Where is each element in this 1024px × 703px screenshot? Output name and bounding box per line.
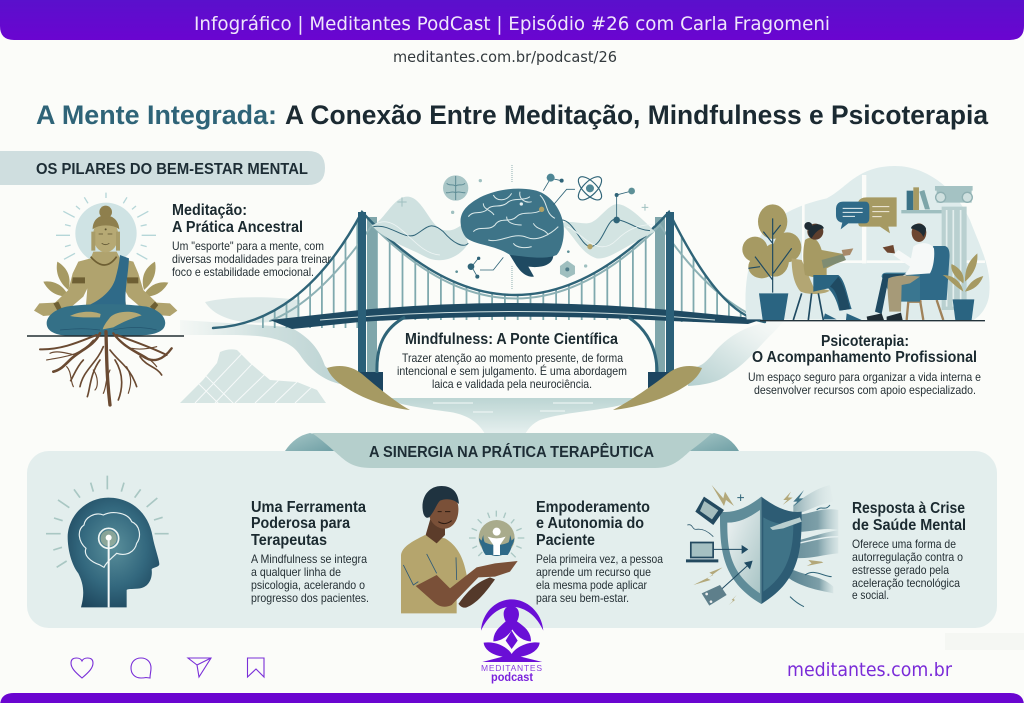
psicoterapia heading: O Acompanhamento Profissional (752, 349, 977, 366)
torso (401, 535, 467, 613)
leaves (43, 262, 168, 297)
brain body (461, 189, 564, 258)
psicoterapia text (748, 371, 981, 397)
crise text: Oferece uma forma de (852, 538, 956, 551)
brain outline (79, 513, 139, 567)
meditação heading (172, 202, 303, 236)
floor line (760, 319, 985, 323)
shield (720, 497, 761, 604)
card: empoderamento (401, 486, 663, 613)
empoderamento heading: Empoderamento (536, 499, 650, 516)
main title: A Conexão Entre Meditação, Mindfulness e Psicoterapia (285, 100, 989, 130)
logo podcast: podcast (491, 670, 533, 684)
far arm (458, 577, 495, 608)
head (68, 498, 159, 607)
halo and rays (56, 193, 156, 264)
legs (47, 304, 165, 336)
crise heading (852, 500, 966, 534)
meditação text (172, 240, 331, 279)
crise text: e social. (852, 589, 889, 602)
section banner: sinergia: A SINERGIA NA PRÁTICA TERAPÊUTICA (369, 443, 654, 461)
crise text (852, 538, 963, 602)
ferramenta heading: Terapeutas (251, 532, 327, 549)
empoderamento text: aprende um recurso que (536, 566, 651, 579)
cerebellum and stem (508, 251, 553, 277)
panel: mindfulness text: laica e validada pela neurociência. (432, 378, 592, 391)
small brain (443, 175, 468, 201)
body (34, 252, 177, 316)
panel: mindfulness text: intencional e sem julgamento. É uma abordagem (397, 365, 627, 378)
speech bubbles (836, 197, 897, 233)
crise heading: Resposta à Crise (852, 500, 965, 517)
empoderamento text: ela mesma pode aplicar (536, 579, 647, 592)
atom (553, 173, 605, 205)
empoderamento heading: e Autonomia do (536, 515, 644, 532)
dark towers (358, 212, 674, 373)
phone (695, 497, 724, 525)
crise heading: de Saúde Mental (852, 517, 966, 534)
waves right (770, 485, 838, 607)
icon: head with glowing brain (46, 476, 169, 607)
faint patch (945, 633, 1024, 650)
meditação text: foco e estabilidade emocional. (172, 266, 314, 279)
panel: sinergia background (27, 451, 997, 628)
psicoterapia text: Um espaço seguro para organizar a vida interna e (748, 371, 981, 384)
psicoterapia heading (752, 333, 977, 366)
icon: meditating figure with roots (34, 193, 177, 336)
therapist (792, 222, 862, 320)
arches (377, 317, 657, 373)
icon: bookmark (248, 658, 264, 677)
ferramenta text: a qualquer linha de (251, 566, 341, 579)
molecules and dots (397, 165, 648, 290)
icon: brain with waves (372, 165, 655, 290)
head (91, 206, 120, 252)
social icons (71, 658, 264, 678)
panel: mindfulness text (397, 331, 627, 391)
ferramenta heading: Poderosa para (251, 515, 350, 532)
psicoterapia text: desenvolver recursos com apoio especializado. (754, 384, 976, 397)
icon: suspension bridge (213, 212, 765, 410)
symbol (469, 511, 524, 557)
meditação heading: A Prática Ancestral (172, 219, 303, 236)
episode url: meditantes.com.br/podcast/26 (393, 48, 617, 66)
arm bands (53, 277, 158, 311)
card: resposta à crise (686, 485, 966, 607)
ferramenta text: A Mindfulness se integra (251, 553, 367, 566)
shelf and books (901, 210, 942, 213)
client (867, 223, 950, 320)
head (428, 496, 458, 529)
sand banks (327, 366, 410, 410)
plant left (742, 204, 801, 320)
header title: Infográfico | Meditantes PodCast | Episódio #26 com Carla Fragomeni (194, 13, 830, 35)
icon: therapy scene (742, 166, 990, 321)
cables (213, 212, 765, 328)
ferramenta heading (251, 499, 366, 549)
logo: meditantes podcast (481, 599, 543, 684)
ferramenta heading: Uma Ferramenta (251, 499, 366, 516)
meditação text: diversas modalidades para treinar (172, 253, 331, 266)
column (935, 186, 973, 310)
near arm (416, 561, 518, 607)
empoderamento heading (536, 499, 650, 549)
panel: mindfulness text: Mindfulness: A Ponte Científica (405, 331, 618, 348)
icon: comment (131, 658, 151, 678)
footer url: meditantes.com.br (787, 659, 952, 681)
light towers (367, 217, 665, 373)
neck (426, 517, 445, 543)
icon: send (188, 658, 211, 677)
empoderamento text: para seu bem-estar. (536, 592, 629, 605)
panel: psicoterapia (742, 166, 990, 397)
plant right (943, 253, 983, 320)
ferramenta text (251, 553, 369, 605)
panel: meditação (27, 193, 331, 405)
psicoterapia heading: Psicoterapia: (821, 333, 909, 350)
header bar (0, 0, 1024, 40)
robe (86, 255, 129, 307)
meditação text: Um "esporte" para a mente, com (172, 240, 324, 253)
bridge hangers (262, 265, 760, 270)
ground line (27, 335, 184, 337)
footer bar (0, 693, 1024, 703)
panel: mindfulness text: Trazer atenção ao momento presente, de forma (402, 352, 623, 365)
device (702, 585, 727, 606)
icon: person holding symbol (401, 486, 524, 613)
waves (372, 197, 655, 260)
hair (422, 486, 459, 518)
logo arc (481, 599, 543, 631)
icon: heart (71, 658, 93, 678)
crise text: estresse gerado pela (852, 564, 949, 577)
ferramenta text: psicologia, acelerando o (251, 579, 365, 592)
crise text: autorregulação contra o (852, 551, 963, 564)
arrows (707, 549, 750, 597)
roots (40, 332, 172, 405)
section banner: sinergia (285, 433, 739, 468)
rays (46, 476, 169, 567)
section pill: pilares: OS PILARES DO BEM-ESTAR MENTAL (36, 161, 308, 178)
card: ferramenta (46, 476, 369, 607)
ferramenta text: progresso dos pacientes. (251, 592, 369, 605)
river ribbons and hills (180, 297, 774, 403)
empoderamento heading: Paciente (536, 532, 595, 549)
lightning (693, 485, 823, 605)
empoderamento text: Pela primeira vez, a pessoa (536, 553, 663, 566)
deck (270, 303, 763, 329)
crise text: aceleração tecnológica (852, 577, 961, 590)
icon: shield with devices (686, 485, 838, 607)
room blob (745, 166, 990, 320)
logo wordmark: MEDITANTES (481, 663, 542, 673)
logo figure (493, 606, 531, 641)
main title: A Mente Integrada: (36, 100, 277, 130)
laptop (690, 542, 714, 558)
section pill: pilares (0, 151, 325, 185)
empoderamento text (536, 553, 663, 605)
meditação heading: Meditação: (172, 202, 247, 219)
water under bridge (383, 398, 637, 434)
